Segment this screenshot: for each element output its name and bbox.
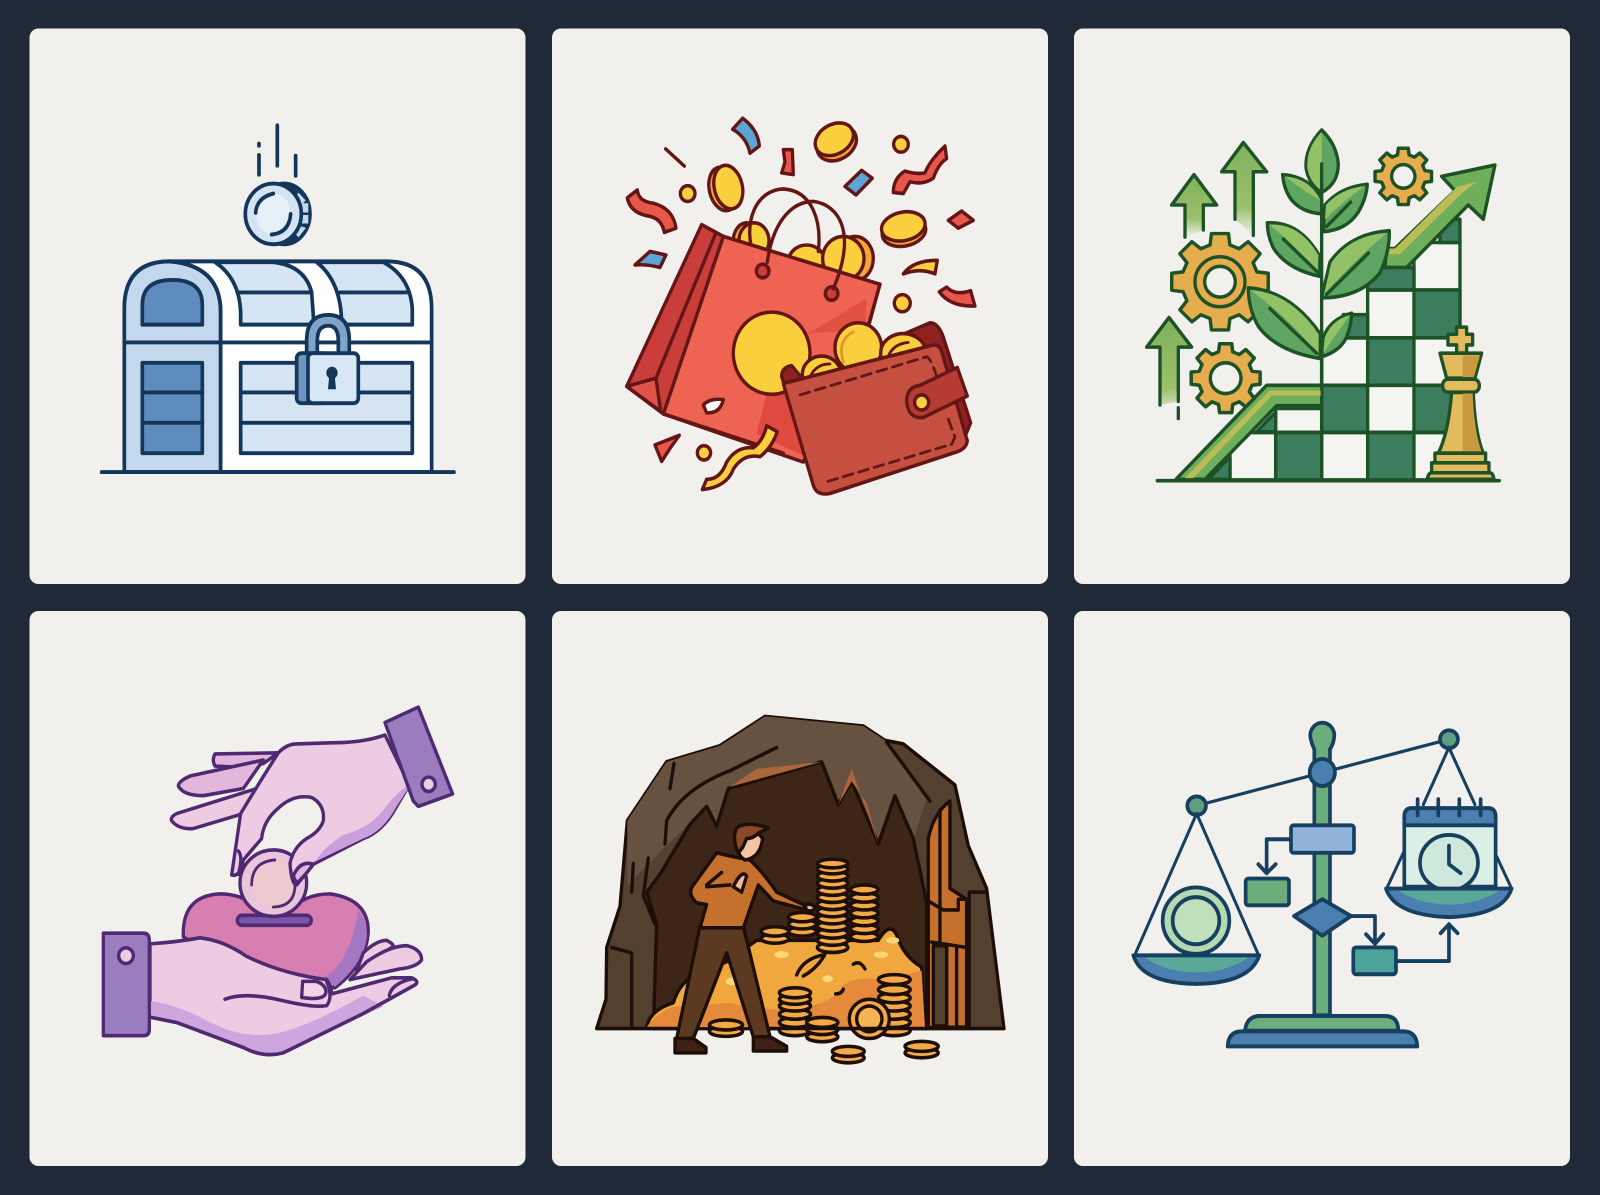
- icon: heart piggy bank: [183, 894, 368, 988]
- coins inside bag: [733, 223, 873, 281]
- icon: chess king: [1427, 327, 1494, 479]
- shopping bag: [627, 201, 880, 462]
- lower hand fingers: [350, 940, 422, 980]
- left pan with coin: [1133, 814, 1259, 984]
- cave rock: [597, 716, 1004, 1029]
- panel: growth strategy: [1074, 28, 1570, 584]
- panel: charity hands and heart bank: [30, 611, 526, 1166]
- cave base line: [597, 1024, 1004, 1034]
- lower cuff: [103, 933, 149, 1036]
- gold heap: [647, 929, 925, 1027]
- panel: cave of gold: [552, 611, 1048, 1166]
- upper hand: [171, 735, 409, 885]
- man figure: [675, 824, 815, 1053]
- icon: falling coin: [245, 184, 310, 244]
- chessboard staircase: [1208, 219, 1460, 480]
- scale stand: [1228, 723, 1417, 1046]
- icon: falling coin motion lines: [259, 125, 296, 176]
- icon: gears: [1172, 148, 1432, 413]
- lower growth band: [1176, 385, 1322, 479]
- scale beam: [1187, 730, 1458, 815]
- wallet with coins: [782, 323, 971, 494]
- upper cuff: [385, 707, 453, 806]
- ground line: [102, 467, 454, 478]
- cave right pillars: [928, 801, 985, 1028]
- flowchart: [1246, 825, 1458, 974]
- panel: treasure chest savings: [30, 28, 526, 584]
- plant with leaves: [1248, 130, 1389, 387]
- right pan with calendar clock: [1386, 747, 1512, 917]
- panel: shopping bag and wallet: [552, 28, 1048, 584]
- ground line: [1157, 476, 1499, 486]
- coin stacks: [709, 859, 938, 1063]
- panel: balance scale with time and money: [1074, 611, 1570, 1166]
- up arrows: [1147, 142, 1267, 419]
- back handle: [750, 189, 819, 271]
- lower hand: [150, 938, 417, 1055]
- yellow streamer: [702, 426, 777, 490]
- confetti and flying coins: [627, 117, 975, 461]
- rising growth arrow: [1385, 165, 1495, 267]
- icon: coin being dropped: [240, 850, 307, 916]
- chest lid and body: [124, 261, 432, 472]
- icon: padlock: [297, 315, 358, 403]
